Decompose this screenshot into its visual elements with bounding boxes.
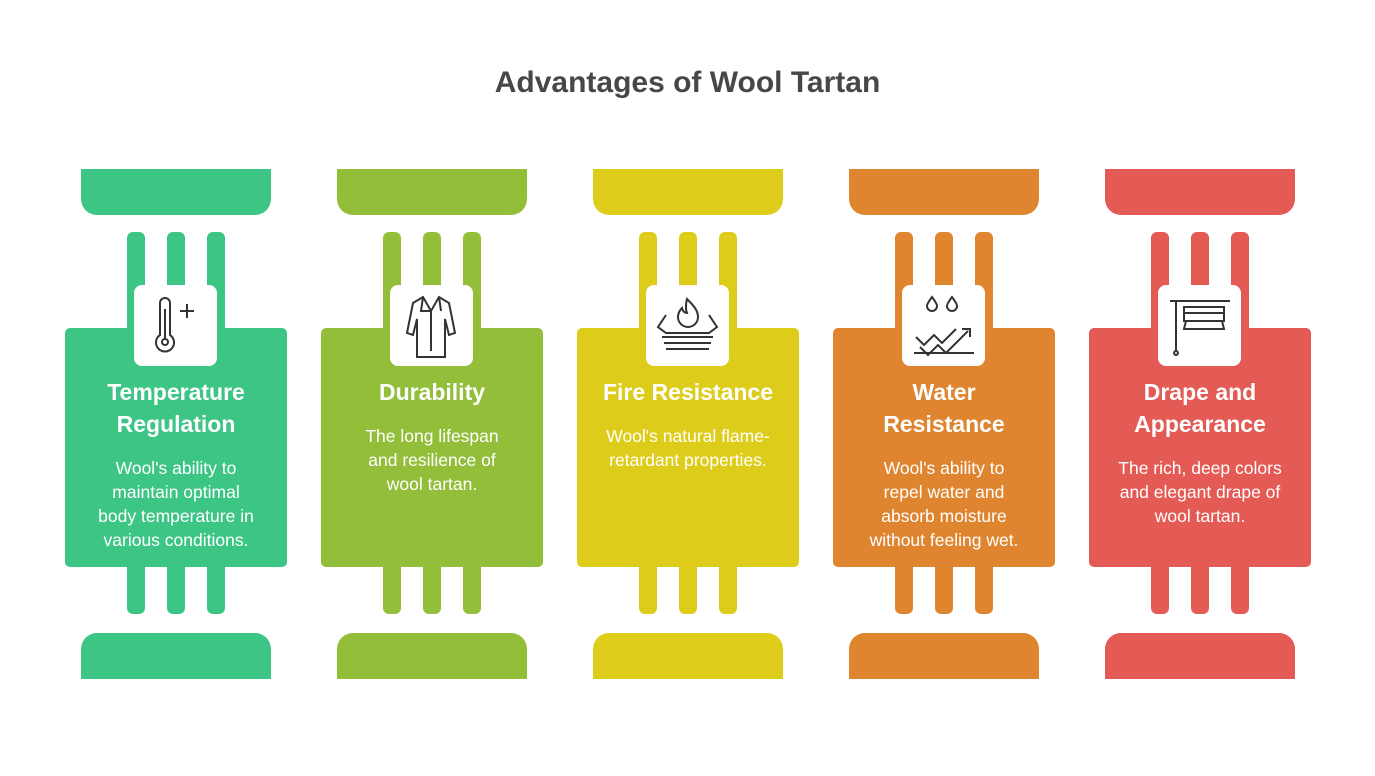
panel: drape and appearance: Appearance <box>1134 411 1266 437</box>
icon: water drops <box>902 285 985 366</box>
panel: temperature regulation: Regulation <box>117 411 235 437</box>
panel: drape and appearance: The rich, deep colors <box>1118 458 1282 478</box>
panel: fire resistance: Wool's natural flame- <box>606 426 770 446</box>
panel: durability: and resilience of <box>368 450 496 470</box>
panel: temperature regulation: maintain optimal <box>112 482 240 502</box>
panel: water resistance: absorb moisture <box>881 506 1007 526</box>
panel: water resistance: Resistance <box>883 411 1005 437</box>
panel: fire resistance: Fire Resistance <box>603 379 773 405</box>
icon: robe <box>390 285 473 366</box>
panel: water resistance: Wool's ability to <box>884 458 1004 478</box>
panel: fire resistance <box>577 169 799 679</box>
panel: fire resistance: retardant properties. <box>609 450 767 470</box>
icon: window blind <box>1158 285 1241 366</box>
panel: water resistance <box>833 169 1055 679</box>
panel: water resistance: Water <box>912 379 976 405</box>
icon: thermometer <box>134 285 217 366</box>
panel: drape and appearance: and elegant drape of <box>1120 482 1280 502</box>
panel: temperature regulation <box>65 169 287 679</box>
panel: water resistance: without feeling wet. <box>870 530 1018 550</box>
panel: durability: Durability <box>379 379 485 405</box>
panel: durability <box>321 169 543 679</box>
panel: drape and appearance: Drape and <box>1144 379 1256 405</box>
panel: durability: wool tartan. <box>387 474 477 494</box>
panel: drape and appearance <box>1089 169 1311 679</box>
icon: fire on fabric <box>646 285 729 366</box>
panel: water resistance: repel water and <box>884 482 1004 502</box>
panel: temperature regulation: body temperature in <box>98 506 254 526</box>
panel: durability: The long lifespan <box>365 426 499 446</box>
title: Advantages of Wool Tartan <box>495 66 880 99</box>
panel: temperature regulation: Wool's ability to <box>116 458 236 478</box>
panel: drape and appearance: wool tartan. <box>1155 506 1245 526</box>
panel: temperature regulation: Temperature <box>107 379 245 405</box>
panel: temperature regulation: various conditions. <box>104 530 248 550</box>
